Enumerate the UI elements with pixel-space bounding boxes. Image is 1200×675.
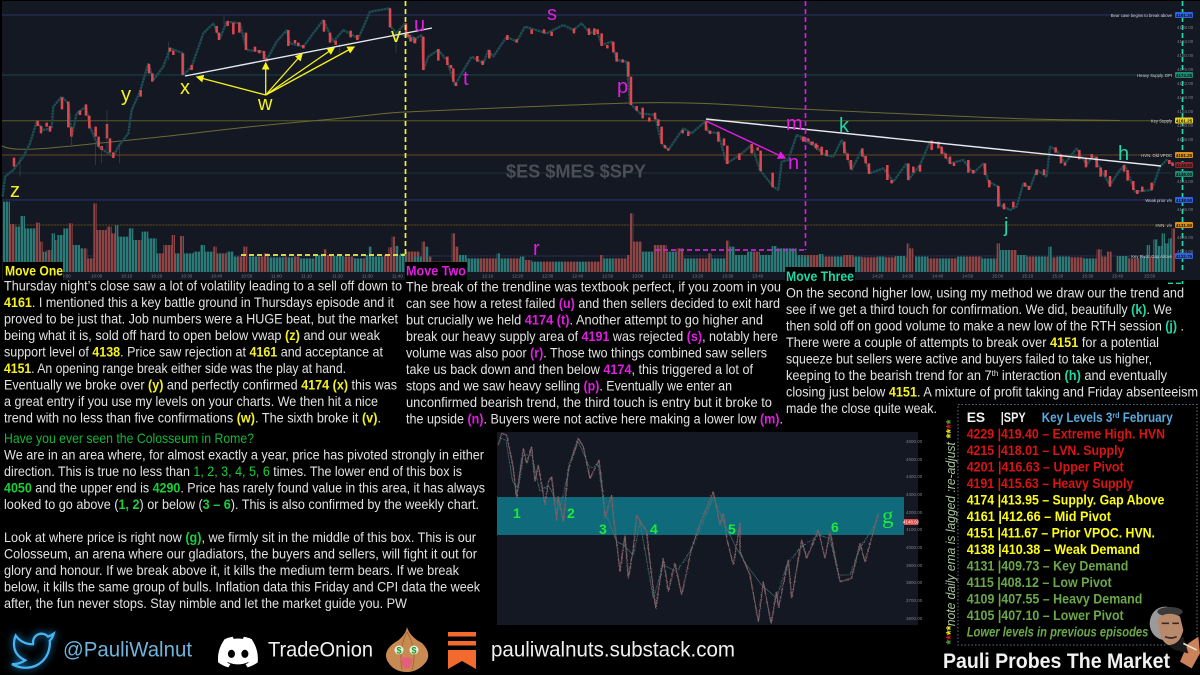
time axis: 15:00 xyxy=(992,274,1004,278)
text block: Move Two body: unconfirmed bearish trend, the third touch is entry but it broke to xyxy=(406,395,772,410)
time axis: 11:20 xyxy=(332,274,343,278)
pivot numbers: g xyxy=(882,503,894,528)
time axis xyxy=(2,272,1200,280)
heading: Move One: Move One xyxy=(5,262,63,278)
price axis: 4174.25 xyxy=(1176,73,1193,78)
time axis: 12:40 xyxy=(572,274,584,278)
header row: February xyxy=(1120,410,1173,425)
text block: Move Three body: There were a couple of attempts to break over 4151 for a potential xyxy=(786,335,1159,350)
price axis: 4128.00 xyxy=(1177,235,1194,240)
time axis: 10:50 xyxy=(241,274,253,278)
text block: Move One body: Eventually we broke over (y) and perfectly confirmed 4174 (x) this was xyxy=(4,378,397,392)
time axis: 15:30 xyxy=(1082,274,1094,278)
time axis: 14:20 xyxy=(872,274,884,278)
header row: ES xyxy=(967,410,985,425)
icon: onion mascot: $ xyxy=(411,646,417,656)
axis labels: 4500.00 xyxy=(906,457,923,462)
text block: Move Two body: The break of the trendline was textbook perfect, if you zoom in you xyxy=(406,280,781,294)
time axis: 15:10 xyxy=(1022,274,1034,278)
level rows: 4138 |410.38 – Weak Demand xyxy=(967,542,1140,557)
text block: Colosseum body: Colosseum, an arena where our gladiators, the buyers and sellers, will fight it out for xyxy=(4,546,477,562)
price axis: 4176.00 xyxy=(1177,67,1194,72)
chart letters: k xyxy=(839,115,850,137)
time axis: 10:20 xyxy=(151,274,163,278)
text block: Move One body: support level of 4138. Price saw rejection at 4161 and acceptance at xyxy=(4,344,383,360)
text block: Move One body: being what it is, sold off hard to open below vwap (z) and our weak xyxy=(4,328,380,343)
time axis: 10:40 xyxy=(211,274,223,278)
text block: Colosseum body: 4050 and the upper end is 4290. Price has rarely found value in this area, it has always xyxy=(4,480,485,496)
icon: onion mascot: $ xyxy=(396,646,402,656)
chart: weekly Colosseum chart xyxy=(497,432,923,625)
axis labels: 3600.00 xyxy=(906,616,923,621)
text block: Colosseum body: We are in an area where, for almost exactly a year, price has pivoted strongly in either xyxy=(4,448,484,462)
trendline one xyxy=(185,28,432,76)
time axis: 13:20 xyxy=(692,274,704,278)
time axis: 15:50 xyxy=(1144,274,1156,278)
price axis: 4146.00 xyxy=(1176,172,1193,177)
price axis: 4131.50 xyxy=(1176,223,1193,228)
pivot numbers: 3 xyxy=(599,521,607,537)
level rows: 4131 |409.73 – Key Demand xyxy=(967,558,1128,574)
price axis: 4168.00 xyxy=(1177,95,1194,100)
chart letters: x xyxy=(180,77,190,99)
time axis: 11:40 xyxy=(392,274,403,278)
chart letters: v xyxy=(391,25,401,47)
Discord name: TradeOnion xyxy=(268,638,373,662)
axis labels: 4100.00 xyxy=(906,527,923,532)
time axis: 14:40 xyxy=(932,274,944,278)
time axis: 15:20 xyxy=(1052,274,1064,278)
time axis: 13:30 xyxy=(722,274,734,278)
level rows: 4201 |416.63 – Upper Pivot xyxy=(967,460,1124,474)
heading: Move Two: Move Two xyxy=(406,262,466,278)
header row xyxy=(967,410,1173,425)
level rows: 4191 |415.63 – Heavy Supply xyxy=(967,476,1134,491)
panel: Colosseum commentary xyxy=(4,431,485,611)
trendline two xyxy=(706,119,1161,166)
Substack URL: pauliwalnuts.substack.com xyxy=(491,638,735,662)
icon: Discord xyxy=(218,637,258,667)
price axis: HVN. Old VPOC xyxy=(1141,153,1172,158)
panel: intraday ES candlestick chart xyxy=(2,1,1200,284)
chart letters: y xyxy=(121,84,131,106)
panel: Move One xyxy=(3,262,402,426)
axis labels: 3800.00 xyxy=(906,580,923,585)
price axis: Bear case begins to break above xyxy=(1111,13,1173,18)
axis labels: 4148.50 xyxy=(903,520,920,525)
time axis: 9:50 xyxy=(62,274,71,278)
time axis: 15:40 xyxy=(1112,274,1124,278)
text block: Colosseum body: looked to go above (1, 2) or below (3 – 6). This is also confirmed by the weekly chart. xyxy=(4,497,479,512)
text block: Move Three body: interaction xyxy=(998,368,1065,383)
price axis: 4184.00 xyxy=(1177,39,1194,44)
text block: Move Three body: th xyxy=(992,368,999,378)
time axis: 11:10 xyxy=(301,274,312,278)
text block: Move Three body: (h) and eventually xyxy=(1065,368,1172,383)
text block: Move Two body: stops and we saw heavy selling (p). Eventually we enter an xyxy=(406,378,732,394)
chart letters: j xyxy=(1003,215,1008,237)
text block: Colosseum body: below, it kills the same group of bulls. Inflation data this Friday and CPI data the week xyxy=(4,580,480,594)
text block: Move Three body: then sold off on good volume to make a new low of the RTH session (j) . xyxy=(786,318,1184,334)
pivot numbers: 5 xyxy=(728,521,736,537)
time axis: 10:10 xyxy=(121,274,133,278)
chart letters xyxy=(10,3,1129,260)
pivot numbers: 2 xyxy=(567,505,575,521)
chart letters: r xyxy=(533,238,540,260)
text block: Move Three body: keeping to the bearish trend for an 7 xyxy=(786,368,1004,383)
note: vertical ema note: ****note daily ema is lagged :re-adjust **** xyxy=(943,419,958,645)
text block: Move One body: a great entry if you use my levels on your charts. We then hit a nice xyxy=(4,394,378,409)
level rows: 4229 |419.40 – Extreme High. HVN xyxy=(967,426,1165,442)
text block: Move One body: Thursday night’s close saw a lot of volatility leading to a sell off down to xyxy=(4,278,402,294)
chart letters: m xyxy=(786,113,803,135)
magenta arrow xyxy=(706,121,785,158)
price axis: 4122.75 xyxy=(1176,254,1193,259)
text block: Move Two body: the upside (n). Buyers were not active here making a lower low (m). xyxy=(406,412,783,426)
text block: Move Three body: made the close quite weak. xyxy=(786,401,937,416)
text block: Move One body: 4151. An opening range break either side was the play at hand. xyxy=(4,361,346,376)
level rows: 4109 |407.55 – Heavy Demand xyxy=(967,592,1142,606)
volume bars xyxy=(3,202,1175,272)
dotted border xyxy=(958,404,1197,645)
header row: Key Levels 3 xyxy=(1042,410,1125,425)
time axis: 12:30 xyxy=(542,274,554,278)
panel: key levels xyxy=(958,404,1197,645)
axis labels: 4400.00 xyxy=(906,474,923,479)
text block: Move One body: proved to be just that. Job numbers were a HUGE beat, but the market xyxy=(4,312,398,326)
icon: onion mascot xyxy=(386,627,428,672)
chart letters: u xyxy=(414,14,425,36)
price axis: 4151.25 xyxy=(1176,153,1193,158)
price axis: Heavy Supply. DPI xyxy=(1137,73,1172,78)
price axis: 4148.50 xyxy=(1176,163,1193,168)
time axis: 10:00 xyxy=(91,274,103,278)
moving average curve xyxy=(2,103,1120,149)
price axis: 4136.00 xyxy=(1177,207,1194,212)
price axis: 4160.00 xyxy=(1177,123,1194,128)
price axis: 4191.25 xyxy=(1176,13,1193,18)
text block: Move Two body: break our heavy supply area of 4191 was rejected (s), notably here xyxy=(406,329,778,344)
yellow arrows w xyxy=(197,47,354,95)
axis labels: 3700.00 xyxy=(906,598,923,603)
header row: |SPY xyxy=(1001,410,1026,425)
axis labels xyxy=(903,439,923,621)
text block: Colosseum body xyxy=(4,448,485,611)
chart letters: t xyxy=(463,68,469,90)
time axis: 14:30 xyxy=(902,274,914,278)
Twitter handle: @PauliWalnut xyxy=(63,638,192,662)
price axis: HVN. v/v xyxy=(1155,223,1173,228)
panel: black text background xyxy=(0,281,1200,675)
price axis: 4156.00 xyxy=(1177,137,1194,142)
price axis xyxy=(1111,12,1194,259)
icon: Substack xyxy=(448,632,476,669)
chart letters: s xyxy=(547,3,557,25)
time axis: 11:00 xyxy=(271,274,282,278)
text block: Move Two body xyxy=(406,280,783,426)
text block: Move Three body: On the second higher low, using my method we draw our the trend and xyxy=(786,286,1184,300)
price axis: 4188.00 xyxy=(1177,25,1194,30)
time axis: 13:40 xyxy=(752,274,764,278)
level rows: 4161 |412.66 – Mid Pivot xyxy=(967,509,1111,524)
level rows: 4215 |418.01 – LVN. Supply xyxy=(967,443,1125,458)
time axis: 13:00 xyxy=(632,274,644,278)
text block: Move One body: 4161. I mentioned this a key battle ground in Thursdays episode and it xyxy=(4,295,394,310)
icon: Twitter bird outline xyxy=(12,634,54,668)
price axis: 4164.00 xyxy=(1177,109,1194,114)
text block: Move One body xyxy=(4,278,402,426)
level rows xyxy=(967,426,1165,640)
icon: caricature of Pauli xyxy=(1150,607,1200,668)
panel: Move Three xyxy=(785,267,1198,416)
price axis: 4161.25 xyxy=(1176,118,1193,123)
price axis: 4124.00 xyxy=(1177,249,1194,254)
pivot numbers: 4 xyxy=(650,521,658,537)
time axis: 10:30 xyxy=(181,274,193,278)
time axis: 14:50 xyxy=(962,274,974,278)
level rows: Lower levels in previous episodes xyxy=(967,624,1149,640)
level rows: 4105 |407.10 – Lower Pivot xyxy=(967,608,1124,623)
chart letters: p xyxy=(617,76,628,98)
dashed guides xyxy=(241,1,1182,284)
text block: Move One body: trend with no less than five confirmations (w). The sixth broke it (v). xyxy=(4,410,381,426)
time axis: 12:20 xyxy=(512,274,524,278)
text block: Move Two body: take us back down and then below 4174, this triggered a lot of xyxy=(406,362,753,377)
Colosseum box band xyxy=(497,497,904,535)
text block: Move Two body: can see how a retest failed (u) and then sellers decided to exit hard xyxy=(406,296,780,311)
price axis: 4172.00 xyxy=(1177,81,1194,86)
price axis: Key Pivot. Gap Above xyxy=(1131,254,1173,259)
axis labels: 3900.00 xyxy=(906,563,923,568)
text block: Move Three body: squeeze but sellers were active and buyers failed to take us higher, xyxy=(786,352,1152,366)
price axis: 4180.00 xyxy=(1177,53,1194,58)
chart letters: n xyxy=(788,152,799,174)
price axis: Weak prior v/v xyxy=(1145,198,1173,203)
time axis: 12:50 xyxy=(602,274,614,278)
pivot numbers: 6 xyxy=(831,519,839,535)
axis labels: 4600.00 xyxy=(906,439,923,444)
level rows: 4115 |408.12 – Low Pivot xyxy=(967,575,1112,590)
text block: Move Two body: volume was also poor (r). Those two things combined saw sellers xyxy=(406,346,767,360)
text block: Move Three body: see if we get a third touch for confirmation. We did, beautifully (k). We xyxy=(786,302,1172,317)
axis labels: 4300.00 xyxy=(906,492,923,497)
pivot numbers: 1 xyxy=(513,505,521,521)
text block: Colosseum body: direction. This is true no less than 1, 2, 3, 4, 5, 6 times. The lower end of this box is xyxy=(4,464,462,479)
watermark tickers: $ES $MES $SPY xyxy=(506,160,647,182)
text block: Move Two body: but crucially we held 4174 (t). Another attempt to go higher and xyxy=(406,312,763,328)
panel: Move Two xyxy=(405,262,783,426)
time axis: 12:10 xyxy=(482,274,494,278)
price axis: Key Supply xyxy=(1151,118,1173,123)
text block: Colosseum body: Look at where price is right now (g), we firmly sit in the middle of this box. This is our xyxy=(4,530,476,545)
price axis: 4138.50 xyxy=(1176,198,1193,203)
axis labels: 4000.00 xyxy=(906,545,923,550)
header row: rd xyxy=(1112,410,1120,420)
brand title: Pauli Probes The Market xyxy=(943,649,1170,673)
level rows: 4151 |411.67 – Prior VPOC. HVN. xyxy=(967,526,1155,540)
price axis: 4144.00 xyxy=(1177,179,1194,184)
price candles xyxy=(3,8,1173,210)
time axis: 11:30 xyxy=(362,274,373,278)
axis labels: 4200.00 xyxy=(906,510,923,515)
level rows: 4174 |413.95 – Supply. Gap Above xyxy=(967,492,1165,508)
time axis: 13:10 xyxy=(662,274,674,278)
text block: Move Three body xyxy=(786,286,1198,416)
heading: Colosseum question: Have you ever seen the Colosseum in Rome? xyxy=(4,431,254,446)
text block: Colosseum body: after, the fun never stops. Stay nimble and let the market guide you. PW xyxy=(4,596,407,611)
footer: social handles xyxy=(12,627,735,672)
pivot numbers xyxy=(513,503,894,537)
chart letters: w xyxy=(257,93,273,115)
chart letters: h xyxy=(1118,143,1129,165)
heading: Move Three: Move Three xyxy=(786,268,854,284)
text block: Colosseum body: glory and honour. If we break above it, it kills the medium term bears. If we break xyxy=(4,563,459,578)
chart letters: z xyxy=(10,180,20,202)
